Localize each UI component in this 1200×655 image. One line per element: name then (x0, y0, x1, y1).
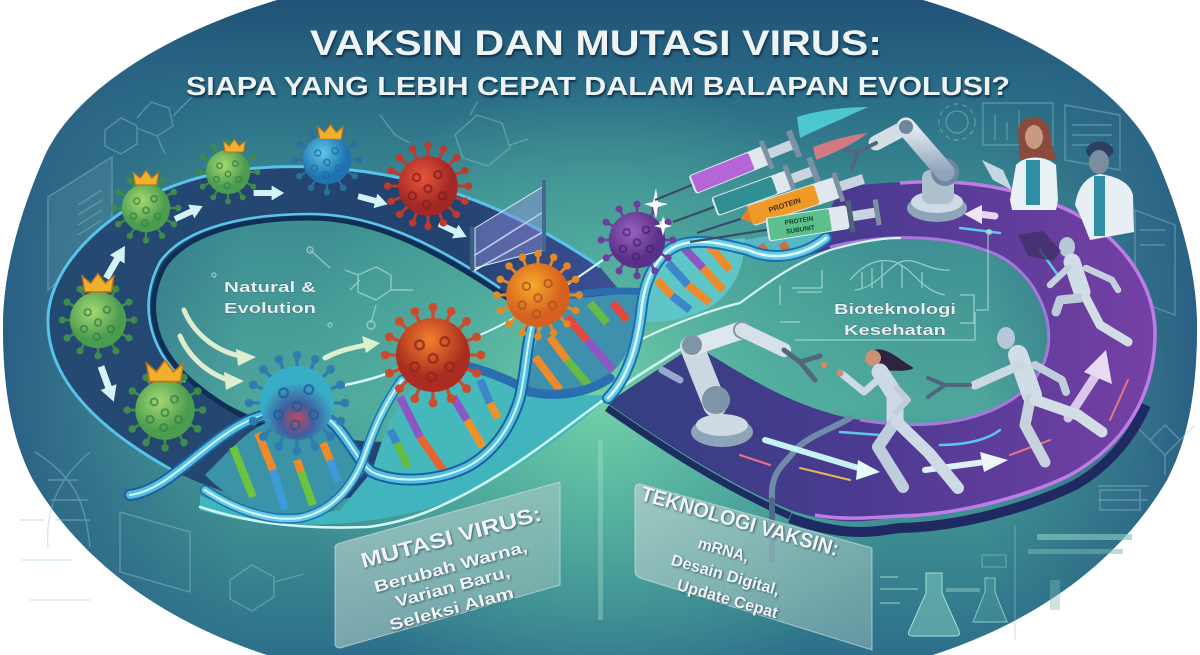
panel: teknologi vaksin: Desain Digital, (669, 552, 781, 599)
robot runner: lower (928, 327, 1102, 462)
syringe: green protein: SUBUNIT (786, 224, 815, 236)
woman runner (836, 350, 958, 488)
robot runner: upper (1050, 237, 1128, 342)
syringe: orange protein (692, 165, 868, 247)
label: bioteknologi kesehatan: Bioteknologi (834, 301, 956, 318)
arrows on left track (93, 186, 470, 405)
glow arcs (200, 212, 900, 528)
centre divider (598, 440, 603, 620)
virus: blue (292, 125, 362, 195)
panel: mutasi virus: Berubah Warna, (372, 539, 529, 596)
panel: mutasi virus: Seleksi Alam (388, 585, 516, 634)
label: natural and evolution (224, 280, 317, 317)
virus: purple target (598, 201, 676, 279)
virus: blue red mutant (245, 351, 349, 455)
teal glow field under helix (200, 395, 610, 525)
label: bioteknologi kesehatan (834, 301, 956, 339)
scientist: man (1075, 142, 1134, 240)
scientist: woman (982, 117, 1058, 210)
label: natural and evolution: Natural & (224, 280, 317, 296)
molecule in left loop (212, 247, 413, 329)
panel: teknologi vaksin: Update Cepat (675, 577, 780, 622)
right track band (607, 182, 1155, 532)
virus: green 2 (196, 139, 260, 204)
panel: teknologi vaksin: TEKNOLOGI VAKSIN: (638, 482, 841, 561)
panel: teknologi vaksin: mRNA, (696, 535, 751, 566)
robot arm: lower (682, 321, 827, 447)
circuit and DNA icon (780, 230, 992, 340)
lab flasks and shelves (880, 534, 1132, 636)
DNA helix strands (130, 238, 826, 519)
panel: teknologi vaksin (635, 482, 872, 650)
finish gate (470, 180, 546, 271)
syringe: green protein (687, 196, 882, 258)
DNA lobes (205, 225, 826, 515)
robot arm: top (846, 120, 967, 222)
DNA helix rungs (233, 243, 790, 510)
title: VAKSIN DAN MUTASI VIRUS: (310, 24, 882, 63)
left track band (48, 167, 640, 503)
sparkle on virus (644, 188, 672, 236)
label: natural and evolution: Evolution (224, 301, 316, 317)
track arrows and speed lines (662, 205, 1128, 480)
virus: orange (493, 250, 583, 340)
syringe: green protein: PROTEIN (784, 215, 814, 227)
curved cream arrows (180, 310, 380, 390)
virus: green 4 (123, 360, 207, 452)
panel: mutasi virus: MUTASI VIRUS: (359, 503, 544, 573)
panel: mutasi virus (335, 482, 560, 648)
syringe: teal (668, 156, 822, 236)
panel: mutasi virus: Varian Baru, (394, 564, 512, 611)
title (186, 24, 1010, 101)
virus: green 3 (59, 274, 137, 359)
virus: red (384, 142, 472, 230)
small robotic arm on track (772, 418, 850, 560)
decorative lab backdrop: left side (20, 92, 528, 611)
label: bioteknologi kesehatan: Kesehatan (844, 322, 946, 339)
virus: green 1 (111, 170, 181, 243)
speed trails (797, 107, 868, 160)
title: SIAPA YANG LEBIH CEPAT DALAM BALAPAN EVOLUSI? (186, 71, 1010, 101)
decorative lab backdrop: right side (939, 103, 1195, 640)
syringe: orange protein: PROTEIN (767, 196, 802, 214)
robotic parts near runner (1018, 231, 1061, 261)
syringe: purple (649, 129, 802, 214)
virus: red orange (381, 303, 485, 407)
